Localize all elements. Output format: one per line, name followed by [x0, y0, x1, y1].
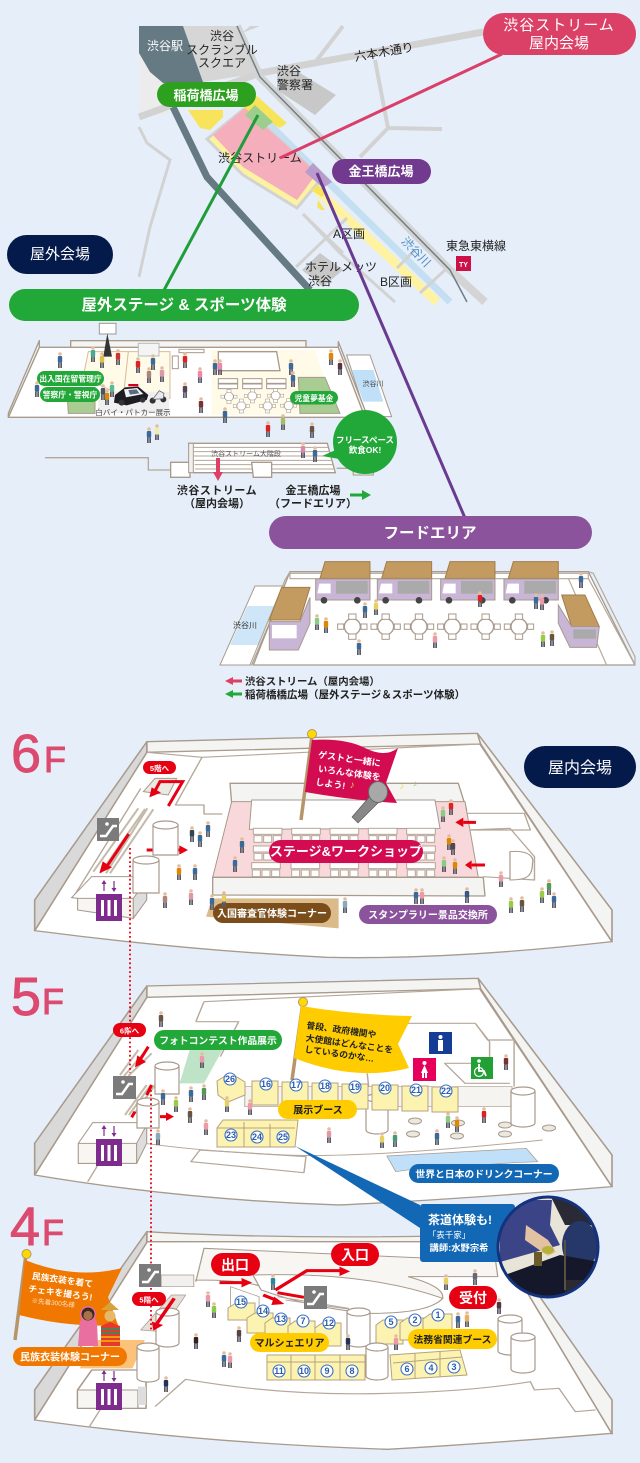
area map of Shibuya Stream: ホテルメッツ	[305, 260, 377, 274]
6F pillars	[133, 821, 178, 893]
pill: children's dream fund	[290, 391, 338, 404]
booth numbers 4F: 13	[276, 1314, 286, 1324]
pill: entrance: 入口	[341, 1247, 369, 1263]
food area map	[220, 562, 635, 665]
heading: food area: フードエリア	[383, 525, 477, 542]
callout: free space	[322, 410, 397, 474]
icon: male restroom	[429, 1032, 452, 1054]
text: outdoor plaza labels: 白バイ・パトカー展示	[95, 407, 171, 417]
booth numbers 4F: 7	[300, 1316, 306, 1326]
pill: immigration agency: 出入国在留管理庁	[39, 374, 102, 384]
callout: tea ceremony	[420, 1204, 515, 1262]
booth numbers 5F: 17	[291, 1080, 301, 1090]
4F booths	[228, 1303, 467, 1380]
booth numbers 5F: 22	[441, 1086, 451, 1096]
floor label: 6F	[11, 724, 66, 784]
booth numbers 4F: 10	[299, 1366, 309, 1376]
pill: stamp rally prize exchange: スタンプラリー景品交換所	[368, 908, 488, 922]
heading: outdoor stage and sports	[9, 289, 359, 321]
pill: marche area: マルシェエリア	[254, 1338, 324, 1350]
area map of Shibuya Stream: 渋谷	[210, 29, 234, 43]
pill: reception	[449, 1286, 497, 1309]
floor label: 4F	[10, 1197, 64, 1257]
legend: routes	[225, 675, 465, 701]
connector lines	[163, 54, 502, 518]
callout: free space: フリースペース	[336, 435, 394, 445]
booth numbers 4F: 2	[412, 1315, 418, 1325]
5F pillars and round tables	[137, 1062, 556, 1139]
label: Shibuya Stream indoor venue: 渋谷ストリーム	[503, 17, 615, 34]
flag: ethnic costume: 民族衣装を着て	[31, 1270, 94, 1289]
area map of Shibuya Stream: 警察署	[277, 77, 313, 92]
booth numbers 4F: 3	[451, 1362, 457, 1372]
icon: escalator 4F left	[139, 1264, 161, 1287]
booth numbers 5F: 20	[380, 1083, 390, 1093]
text: to Shibuya Stream indoor: 渋谷ストリーム	[177, 483, 257, 497]
area map of Shibuya Stream: A区画	[333, 227, 365, 241]
arrow: to Shibuya Stream indoor	[213, 458, 223, 481]
text: outdoor plaza labels: 渋谷ストリーム大階段	[211, 449, 281, 458]
text: to Shibuya Stream indoor: （屋内会場）	[184, 496, 250, 510]
floor label: 5F: F	[42, 981, 64, 1022]
icon: elevator 6F	[96, 880, 122, 921]
pill: police	[40, 387, 100, 402]
heading: food area	[269, 516, 592, 549]
label: outdoor venue: 屋外会場	[30, 246, 90, 263]
pill: ethnic costume corner	[13, 1347, 127, 1366]
label: Inaribashi plaza	[157, 82, 256, 107]
dotted vertical connectors	[130, 848, 151, 1332]
people: food area	[315, 572, 583, 655]
icon: accessible restroom	[471, 1057, 493, 1079]
flag: guest experience	[301, 730, 417, 820]
booth numbers 5F: 16	[261, 1079, 271, 1089]
pill: to 5F from 4F: 5階へ	[139, 1294, 159, 1304]
booth numbers 5F: 23	[226, 1130, 236, 1140]
booth numbers 4F: 8	[349, 1366, 355, 1376]
5F left side: escalators and elevator	[78, 1047, 174, 1163]
pill: to 6F: 6階へ	[120, 1026, 140, 1036]
pill: police: 警察庁・警視庁	[43, 390, 97, 400]
pill: stage and workshop: ステージ&ワークショップ	[270, 844, 422, 859]
label: Inaribashi plaza: 稲荷橋広場	[173, 88, 239, 103]
flag: guest experience: ♪	[400, 781, 404, 791]
callout: tea ceremony: 「表千家」	[428, 1230, 470, 1240]
booth numbers 4F: 11	[274, 1366, 284, 1376]
floor label: 6F: F	[44, 739, 66, 780]
label: indoor venue: 屋内会場	[548, 759, 612, 777]
area map of Shibuya Stream: スクランブル	[186, 42, 258, 57]
pill: entrance	[331, 1243, 379, 1266]
flag: guest experience: しよう!	[315, 777, 346, 791]
floor label: 6F: 6	[11, 724, 41, 784]
pill: reception: 受付	[459, 1290, 487, 1306]
arrow: to food area	[350, 490, 371, 500]
label: Kannobashi plaza	[332, 159, 431, 184]
legend: routes: 渋谷ストリーム（屋内会場）	[245, 675, 380, 688]
4F pillars	[137, 1308, 535, 1382]
flag: guest experience: ♪	[413, 779, 417, 788]
label: Kannobashi plaza: 金王橋広場	[348, 164, 414, 179]
area map of Shibuya Stream: B区画	[380, 275, 412, 289]
icon: escalator 4F center	[304, 1286, 327, 1309]
booth numbers 4F: 1	[435, 1310, 441, 1320]
booth numbers 4F: 14	[258, 1306, 268, 1316]
photo: tea ceremony	[495, 1195, 601, 1300]
text: to Kannobashi food area: 金王橋広場	[286, 483, 340, 497]
area map of Shibuya Stream: TY	[459, 262, 468, 269]
icon: elevator 4F	[96, 1370, 122, 1410]
area map of Shibuya Stream: 渋谷ストリーム	[218, 151, 302, 165]
label: Shibuya Stream indoor venue	[483, 13, 636, 55]
booth numbers 5F	[224, 1073, 452, 1143]
5F floor plan	[35, 978, 612, 1205]
booth numbers 5F: 18	[320, 1081, 330, 1091]
pill: immigration officer experience	[213, 903, 331, 923]
6F stage and workshop room	[213, 783, 485, 896]
booth numbers 5F: 24	[252, 1132, 262, 1142]
pill: photo contest exhibition	[154, 1030, 282, 1050]
pill: marche area	[250, 1333, 329, 1352]
area map of Shibuya Stream: 渋谷	[277, 64, 301, 78]
callout: free space: 飲食OK!	[349, 445, 381, 455]
flag: government agencies question: 大使館はどんなことを	[305, 1032, 394, 1055]
pill: exit: 出口	[221, 1257, 249, 1273]
flag: guest experience: いろんな体験を	[318, 763, 381, 782]
callout: tea ceremony: 講師:水野宗希	[430, 1242, 488, 1253]
callout pointer: tea ceremony	[295, 1146, 420, 1228]
pill: drink corner: 世界と日本のドリンクコーナー	[415, 1168, 553, 1180]
text: outdoor plaza labels: 渋谷川	[362, 379, 384, 388]
flag: ethnic costume: チェキを撮ろう!	[28, 1283, 93, 1302]
pill: to 5F from 4F	[132, 1292, 166, 1306]
flag: guest experience: ゲストと一緒に	[318, 749, 381, 768]
area map of Shibuya Stream: 渋谷駅	[147, 39, 183, 53]
illustration: costume figures	[78, 1302, 120, 1346]
pill: children's dream fund: 児童夢基金	[295, 393, 334, 403]
pill: immigration agency	[37, 371, 104, 386]
booth numbers 4F: 12	[324, 1318, 334, 1328]
heading: outdoor stage and sports: 屋外ステージ & スポーツ体験	[81, 295, 287, 314]
text: river label: 渋谷川	[233, 620, 257, 630]
booth numbers 5F: 21	[411, 1085, 421, 1095]
pill: photo contest exhibition: フォトコンテスト作品展示	[159, 1034, 277, 1047]
area map of Shibuya Stream: 渋谷川	[398, 234, 434, 270]
icon: female restroom	[413, 1058, 436, 1081]
pill: justice ministry booths: 法務省関連ブース	[414, 1333, 492, 1346]
icon: escalator 6F	[97, 818, 119, 841]
flag: government agencies question: しているのかな…	[304, 1044, 375, 1064]
legend: routes: 稲荷橋橋広場（屋外ステージ＆スポーツ体験）	[245, 688, 465, 701]
booth numbers 4F: 4	[428, 1363, 434, 1373]
pill: to 6F	[113, 1023, 146, 1037]
flag: government agencies question	[292, 998, 412, 1080]
booth numbers 4F: 5	[388, 1317, 394, 1327]
pill: to 5F: 5階へ	[150, 763, 170, 773]
booth numbers 5F: 19	[350, 1082, 360, 1092]
text: to Kannobashi food area: （フードエリア）	[269, 497, 357, 510]
flag: ethnic costume	[15, 1250, 122, 1340]
pill: exhibition booth	[278, 1100, 357, 1119]
booth numbers 4F	[235, 1296, 460, 1377]
area map of Shibuya Stream	[139, 26, 506, 302]
area map of Shibuya Stream: 東急東横線	[446, 238, 506, 253]
people: outdoor plaza	[35, 346, 342, 462]
5F exhibition booths	[217, 1073, 458, 1147]
4F floor plan	[35, 1232, 612, 1449]
floor label: 4F: F	[42, 1212, 64, 1253]
6F left side: escalators and elevator	[72, 778, 188, 918]
booth numbers 5F: 25	[278, 1132, 288, 1142]
people: 4F	[164, 1269, 501, 1392]
area map of Shibuya Stream: 渋谷	[308, 274, 332, 288]
pill: stamp rally prize exchange	[359, 905, 497, 924]
booth numbers 4F: 9	[324, 1366, 330, 1376]
flag: guest experience: ♪	[350, 780, 354, 791]
flag: ethnic costume: ※先着300名様	[31, 1296, 76, 1309]
label: indoor venue	[524, 746, 636, 788]
label: outdoor venue	[7, 235, 113, 274]
icon: escalator 5F	[113, 1076, 136, 1099]
text: to Shibuya Stream indoor	[177, 483, 257, 510]
callout: tea ceremony: 茶道体験も!	[428, 1212, 492, 1227]
booth numbers 4F: 15	[236, 1297, 246, 1307]
text: to Kannobashi food area	[269, 483, 357, 510]
text: outdoor plaza labels	[95, 379, 384, 458]
label: Shibuya Stream indoor venue: 屋内会場	[529, 35, 589, 52]
people: 6F	[163, 799, 556, 913]
icon: elevator 5F	[96, 1125, 122, 1166]
pill: exit	[211, 1253, 260, 1276]
icon: microphone	[352, 782, 388, 823]
pill: ethnic costume corner: 民族衣装体験コーナー	[20, 1350, 120, 1364]
pill: exhibition booth: 展示ブース	[293, 1104, 343, 1116]
floor label: 5F: 5	[11, 967, 41, 1027]
floor label: 5F	[11, 967, 64, 1027]
pill: drink corner	[409, 1164, 559, 1183]
pill: immigration officer experience: 入国審査官体験コーナー	[217, 907, 327, 920]
floor label: 4F: 4	[10, 1197, 40, 1257]
flag: government agencies question: 普段、政府機関や	[306, 1019, 377, 1040]
4F red route arrows	[152, 1267, 350, 1331]
area map of Shibuya Stream: スクエア	[198, 56, 246, 70]
people: 5F	[156, 1011, 508, 1148]
outdoor plaza map	[8, 323, 392, 477]
pill: stage and workshop	[269, 840, 423, 863]
pill: to 5F	[143, 761, 176, 774]
booth numbers 4F: 6	[404, 1364, 410, 1374]
6F floor plan	[35, 733, 612, 958]
pill: justice ministry booths	[408, 1329, 497, 1349]
area map of Shibuya Stream: 六本木通り	[353, 40, 415, 64]
booth numbers 5F: 26	[225, 1074, 235, 1084]
